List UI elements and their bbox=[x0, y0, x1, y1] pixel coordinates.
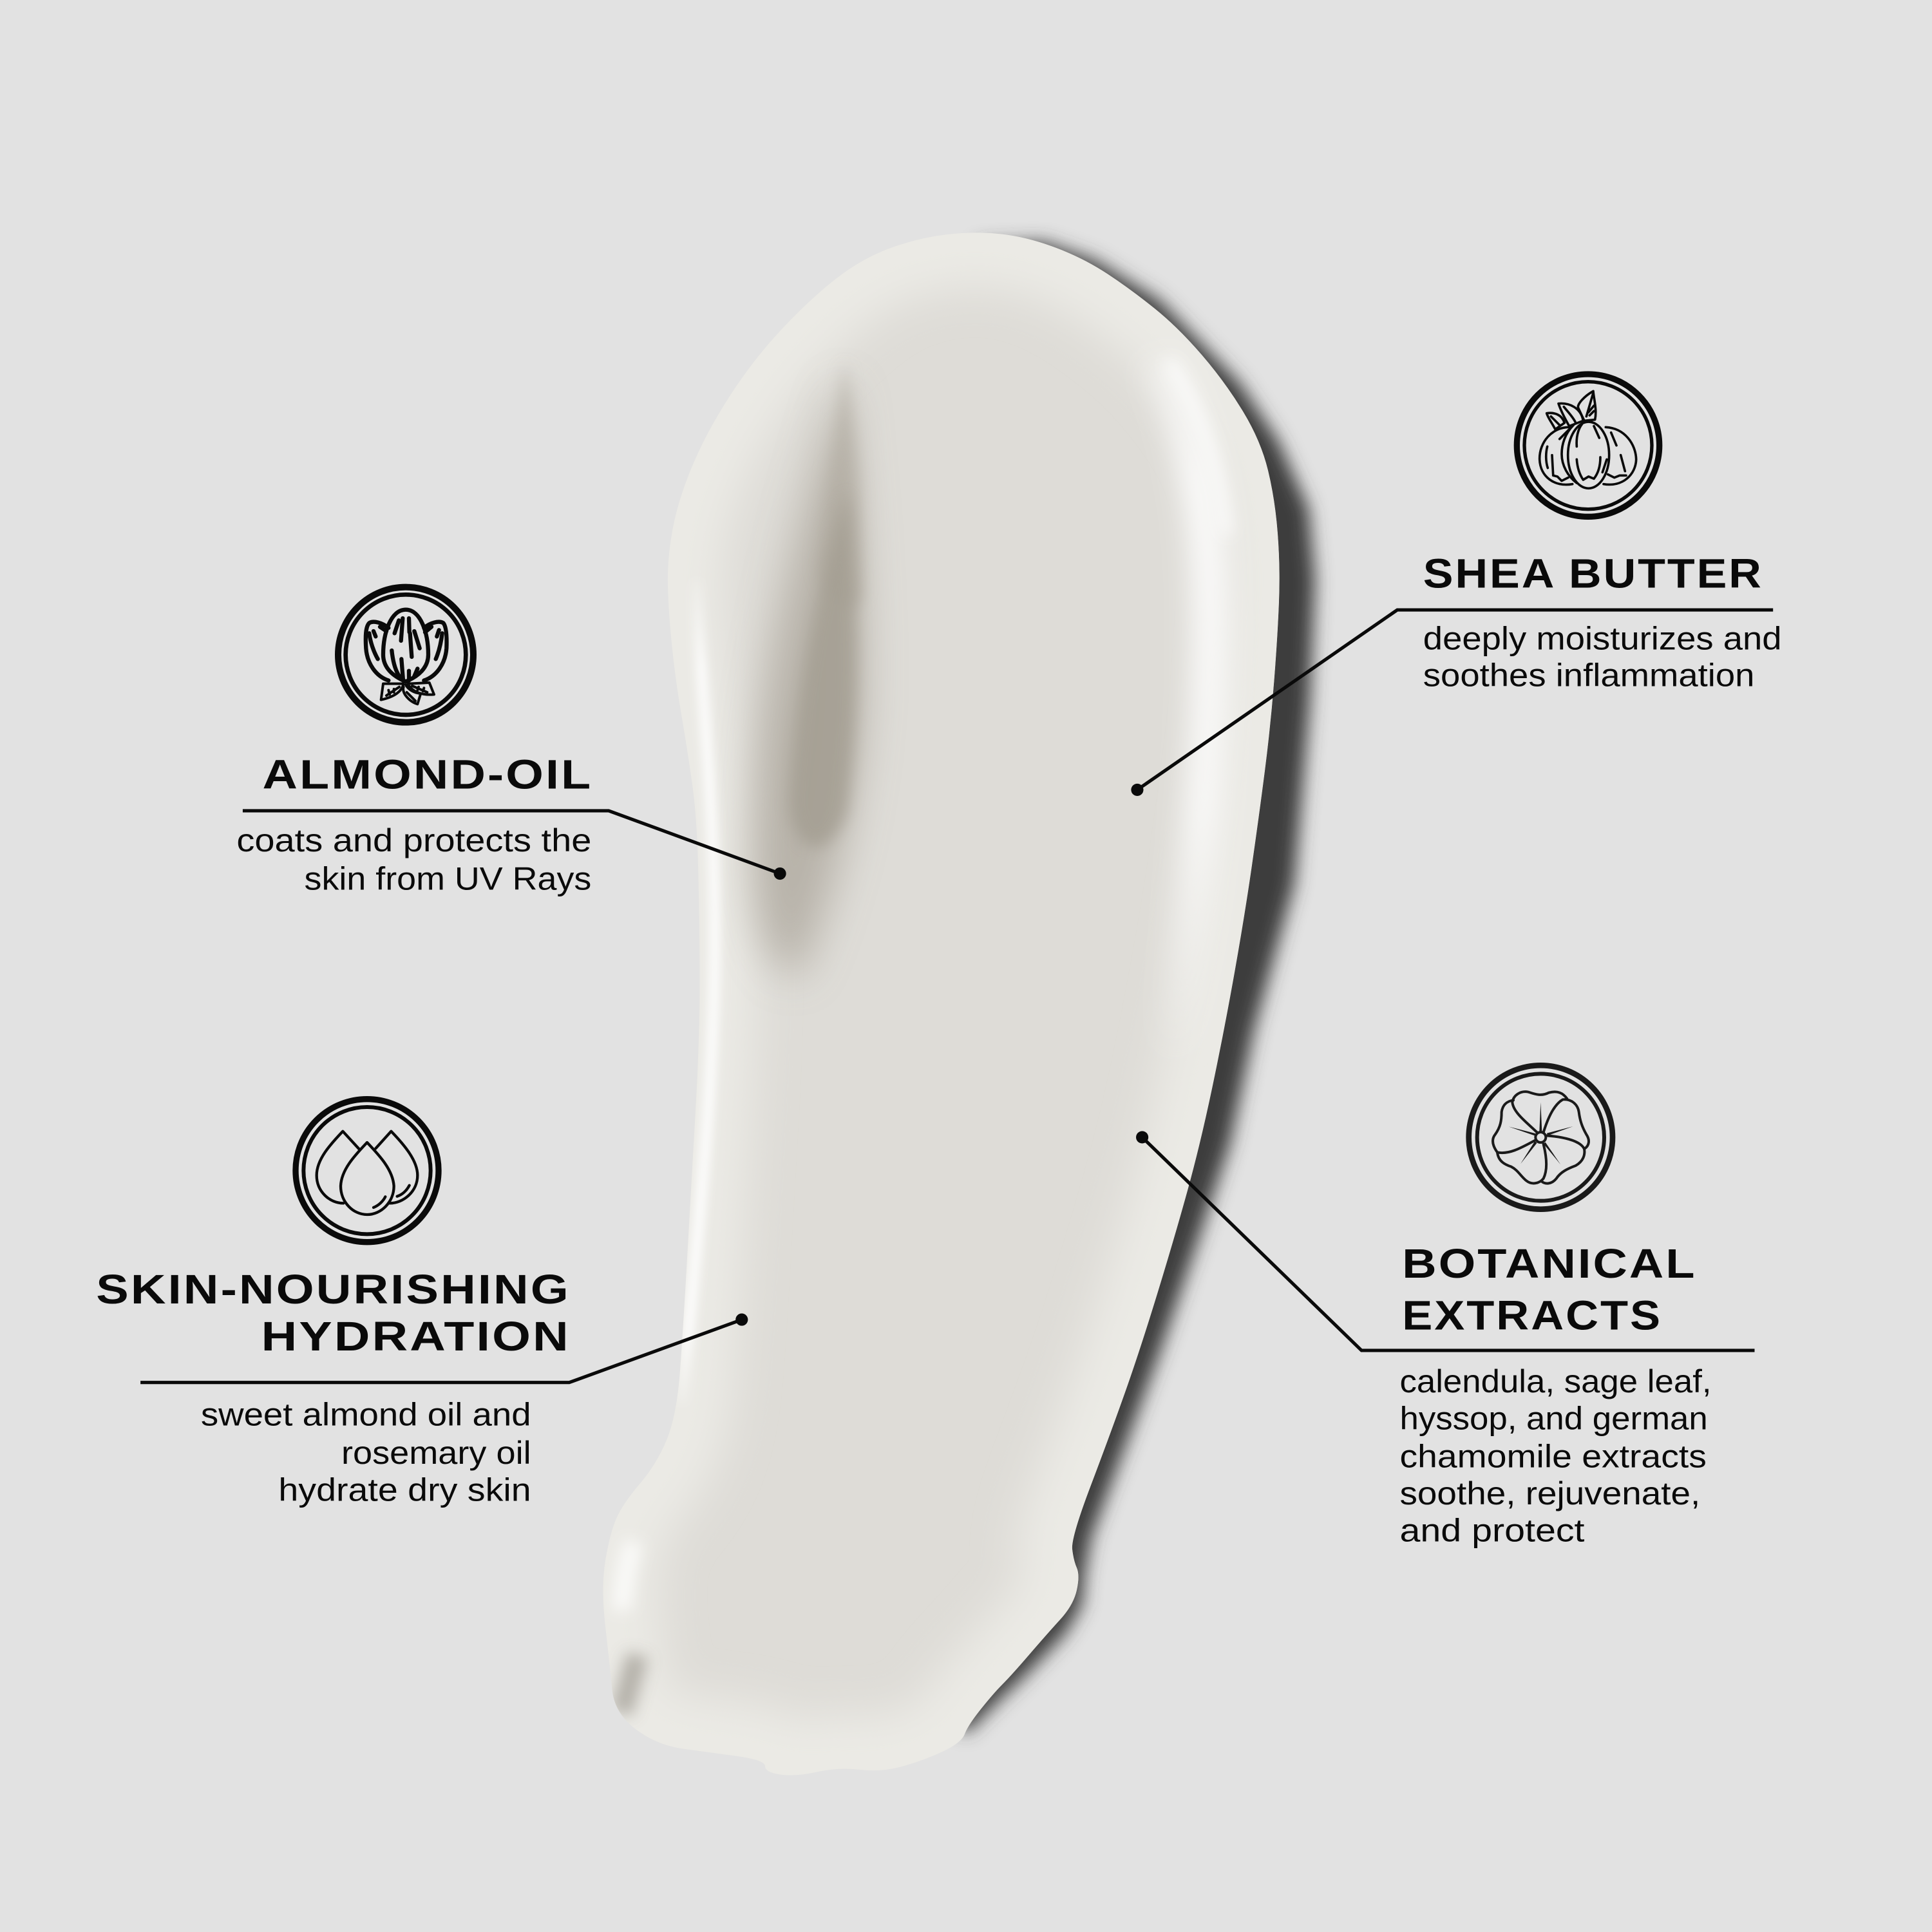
body text: botanical extracts: and protect bbox=[1399, 1513, 1585, 1549]
heading: almond-oil: ALMOND-OIL bbox=[263, 751, 592, 797]
body text: botanical extracts: soothe, rejuvenate, bbox=[1399, 1475, 1700, 1511]
cast shadow bbox=[902, 242, 1315, 1734]
panel: almond oil bbox=[236, 587, 786, 896]
leader line: shea butter bbox=[1131, 610, 1773, 796]
panel: skin-nourishing hydration bbox=[96, 1099, 748, 1508]
icon: almond bbox=[338, 587, 473, 723]
body text: almond-oil: coats and protects the bbox=[236, 822, 591, 858]
body text: botanical extracts: calendula, sage leaf, bbox=[1399, 1363, 1712, 1399]
body text: shea butter: deeply moisturizes and bbox=[1423, 620, 1782, 656]
body text: hydration: rosemary oil bbox=[341, 1435, 531, 1471]
heading: shea butter: SHEA BUTTER bbox=[1423, 551, 1763, 597]
body text: botanical extracts: chamomile extracts bbox=[1399, 1439, 1707, 1475]
heading: skin-nourishing hydration: HYDRATION bbox=[261, 1313, 571, 1359]
body text: hydration: sweet almond oil and bbox=[201, 1397, 531, 1433]
icon: flower bbox=[1469, 1065, 1613, 1209]
heading: botanical extracts bbox=[1402, 1240, 1697, 1338]
heading: skin-nourishing hydration bbox=[96, 1266, 571, 1359]
panel: shea butter bbox=[1131, 374, 1782, 796]
heading: skin-nourishing hydration: SKIN-NOURISHING bbox=[96, 1266, 571, 1312]
icon: water drops bbox=[296, 1099, 439, 1242]
body text: hydration: hydrate dry skin bbox=[278, 1472, 531, 1508]
leader line: almond-oil bbox=[243, 811, 786, 880]
body text: shea butter bbox=[1423, 620, 1782, 694]
body text: botanical extracts: hyssop, and german bbox=[1399, 1400, 1708, 1436]
icon: shea nut bbox=[1517, 374, 1660, 516]
panel: botanical extracts bbox=[1136, 1065, 1754, 1549]
leader line: hydration bbox=[140, 1314, 748, 1383]
body text: botanical extracts bbox=[1399, 1363, 1712, 1549]
body text: almond-oil bbox=[236, 822, 591, 896]
body text: shea butter: soothes inflammation bbox=[1423, 658, 1754, 694]
leader line: botanical extracts bbox=[1136, 1131, 1754, 1350]
body text: almond-oil: skin from UV Rays bbox=[305, 860, 591, 896]
cream body with shading bbox=[603, 232, 1280, 1776]
heading: botanical extracts: BOTANICAL bbox=[1402, 1240, 1697, 1287]
heading: botanical extracts: EXTRACTS bbox=[1402, 1292, 1662, 1338]
body text: hydration bbox=[201, 1397, 531, 1508]
cream swatch bbox=[603, 232, 1315, 1776]
